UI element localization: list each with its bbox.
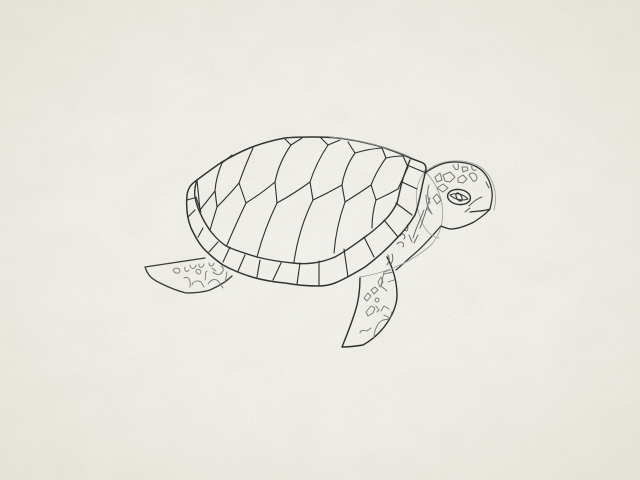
neck and faint construction lines <box>360 161 496 277</box>
eye <box>447 188 471 206</box>
shell outline <box>187 137 426 286</box>
head scales <box>426 164 477 214</box>
inner carapace line <box>195 160 410 264</box>
carapace scutes <box>196 137 408 262</box>
rear flipper scale pattern <box>173 263 227 288</box>
neck skin marks <box>387 198 430 265</box>
sea turtle drawing <box>145 137 496 347</box>
head <box>425 162 492 229</box>
rear flipper <box>145 258 232 293</box>
front flipper scale pattern <box>360 270 394 338</box>
marginal scutes <box>187 165 426 286</box>
front flipper <box>342 257 397 347</box>
